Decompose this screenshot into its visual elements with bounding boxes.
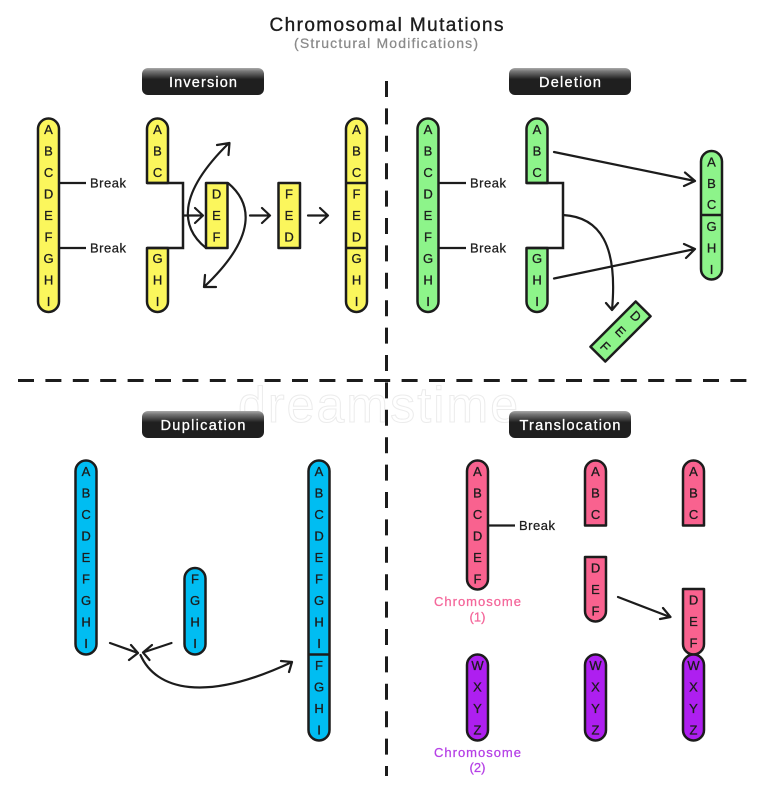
chromosome 2 middle: W <box>589 658 602 673</box>
chromosome 1 pink: D <box>473 528 482 544</box>
chromosome: original yellow: I <box>47 294 50 309</box>
break label upper <box>438 176 506 190</box>
heading: translocation: Translocation <box>520 418 620 434</box>
break label lower: Break <box>90 240 126 256</box>
arrow: ABC to result <box>554 152 695 186</box>
chromosome: lower fragment GHI: H <box>153 272 162 288</box>
chromosome: duplicated result: H <box>314 614 324 630</box>
fragment DEF middle: E <box>591 582 600 597</box>
chromosome: upper fragment ABC: C <box>153 165 162 180</box>
break bracket <box>526 183 563 248</box>
fragment DEF attached <box>683 589 704 654</box>
chromosome: original yellow: F <box>45 230 53 244</box>
chromosome: original yellow: B <box>44 144 53 158</box>
chromosome: duplicated result: F <box>315 658 323 673</box>
arrow: DEF removed <box>563 215 618 310</box>
heading: duplication <box>142 411 264 438</box>
chromosome: original yellow: C <box>44 165 53 180</box>
chromosome: deletion result: I <box>710 262 713 277</box>
chromosome: duplicated result: D <box>314 528 324 544</box>
arrow: to result <box>308 208 328 223</box>
arrow: to DEF <box>184 208 203 223</box>
break label lower: Break <box>470 240 506 256</box>
chromosome: original yellow: G <box>43 251 54 266</box>
fragment DEF <box>206 183 228 248</box>
chromosome: original blue: I <box>84 636 88 651</box>
chromosome: original yellow: E <box>44 208 53 223</box>
chromosome: duplicated result: G <box>314 593 324 608</box>
panel: duplication <box>76 411 330 740</box>
break label upper <box>59 176 126 190</box>
chromosome: inverted result: B <box>352 144 361 158</box>
break label lower <box>59 240 126 256</box>
chromosome 1 pink: A <box>473 464 482 479</box>
chromosome: original blue: F <box>82 572 90 586</box>
panel: deletion <box>418 68 722 362</box>
fragment DEF middle <box>585 557 606 622</box>
arrow: from original <box>110 643 138 660</box>
chromosome: copy FGHI: I <box>193 636 197 651</box>
chromosome 2 right: X <box>689 680 698 694</box>
chromosome: upper fragment ABC: C <box>532 165 542 180</box>
chromosome: original yellow <box>38 118 59 312</box>
chromosome: original blue: E <box>82 550 91 565</box>
fragment DEF middle: D <box>591 560 600 576</box>
title: Chromosomal Mutations <box>270 15 504 36</box>
subtitle: (Structural Modifications) <box>294 35 478 51</box>
chromosome: deletion result: C <box>707 197 716 212</box>
label: chromosome 2: (2) <box>470 760 485 775</box>
chromosome 2 middle: Z <box>592 722 600 738</box>
chromosome: original blue: A <box>82 464 91 479</box>
watermark: dreamstime <box>238 377 518 433</box>
chromosome: duplicated result: I <box>317 722 321 738</box>
chromosome: copy FGHI: F <box>191 572 199 586</box>
chromosome: original blue: G <box>81 593 91 608</box>
label: chromosome 2: Chromosome <box>434 745 521 760</box>
chromosome: original yellow: D <box>44 186 53 202</box>
fragment DEF rotated: D <box>627 308 644 325</box>
chromosome 1 pink: B <box>473 486 482 500</box>
chromosome: upper fragment ABC: A <box>533 122 542 137</box>
chromosome: inverted result: C <box>352 165 361 180</box>
chromosome: original green: C <box>423 165 433 180</box>
chromosome: original blue: D <box>81 528 91 544</box>
panel: translocation <box>434 411 704 775</box>
fragment DEF attached: D <box>689 592 698 608</box>
chromosome: duplicated result: F <box>315 572 323 586</box>
fragment ABC right: A <box>689 464 698 479</box>
chromosome: deletion result: H <box>707 240 716 256</box>
fragment ABC right: B <box>689 486 698 500</box>
fragment ABC middle: B <box>591 486 600 500</box>
chromosome: duplicated result: E <box>315 550 324 565</box>
fragment DEF rotated: E <box>612 323 629 340</box>
break label <box>488 518 556 533</box>
heading: duplication: Duplication <box>160 418 246 434</box>
arrow: curve up <box>188 143 230 248</box>
chromosome: upper fragment ABC: B <box>153 144 162 158</box>
fragment FED: D <box>284 230 294 244</box>
break label lower <box>438 240 506 256</box>
chromosome: original yellow: H <box>44 272 53 288</box>
chromosome: deletion result: G <box>706 219 717 234</box>
chromosome: inverted result: A <box>352 122 361 137</box>
heading: deletion: Deletion <box>539 75 601 91</box>
chromosome: original blue: B <box>82 486 90 500</box>
panel: inversion <box>38 68 367 312</box>
chromosome: original green: I <box>426 294 430 309</box>
arrow: GHI to result <box>554 244 695 278</box>
chromosome 2 right: Y <box>689 701 698 716</box>
chromosome 1 pink <box>467 460 488 590</box>
fragment ABC middle: C <box>591 507 600 522</box>
label: chromosome 2 <box>434 745 521 775</box>
chromosome: duplicated result: G <box>314 680 324 694</box>
fragment FED: E <box>285 208 294 223</box>
fragment ABC right: C <box>689 507 698 522</box>
chromosome: duplicated result: H <box>314 701 324 716</box>
fragment DEF rotated <box>590 301 651 362</box>
chromosome: inverted result <box>346 118 367 312</box>
label: chromosome 1: Chromosome <box>434 594 521 609</box>
fragment DEF attached: E <box>689 614 698 629</box>
label: chromosome 1 <box>434 594 521 624</box>
break label: Break <box>519 518 556 533</box>
chromosome: duplicated result: C <box>314 507 324 522</box>
chromosome 2 purple: W <box>471 658 484 673</box>
chromosome: inverted result: G <box>351 251 362 266</box>
chromosome 1 pink: C <box>473 507 482 522</box>
chromosome: original blue: H <box>81 614 91 630</box>
label: chromosome 1: (1) <box>470 610 485 624</box>
heading: deletion <box>509 68 631 95</box>
chromosome: original yellow: A <box>44 122 53 137</box>
fragment DEF: F <box>213 230 221 244</box>
chromosome: inverted result: I <box>355 294 358 309</box>
chromosome: lower fragment GHI: G <box>152 251 163 266</box>
chromosome: duplicated result <box>308 460 330 740</box>
chromosome 2 right <box>683 654 704 740</box>
break label upper: Break <box>470 176 506 190</box>
chromosome: original green: A <box>424 122 433 137</box>
break bracket <box>147 183 183 248</box>
chromosome: original blue: C <box>81 507 91 522</box>
chromosome: deletion result: B <box>707 176 716 191</box>
heading: translocation <box>509 411 631 438</box>
chromosome: original green: G <box>423 251 433 266</box>
chromosome: original green <box>418 118 438 312</box>
chromosome: original green: B <box>424 144 432 158</box>
heading: inversion <box>142 68 264 95</box>
chromosome: copy FGHI: G <box>190 593 200 608</box>
fragment DEF attached: F <box>690 636 698 650</box>
chromosome: lower fragment GHI: I <box>156 294 159 309</box>
chromosome: deletion result: A <box>707 154 716 170</box>
fragment FED: F <box>285 186 293 202</box>
chromosome 1 pink: E <box>473 550 482 565</box>
break label upper: Break <box>90 176 126 190</box>
chromosome: upper fragment ABC: A <box>153 122 162 137</box>
arrow: from copy <box>143 643 172 660</box>
vertical divider <box>385 81 388 776</box>
chromosome 2 middle: X <box>591 680 600 694</box>
chromosome 1 pink: F <box>474 572 482 586</box>
chromosome 2 middle: Y <box>591 701 600 716</box>
chromosome 2 right: W <box>687 658 700 673</box>
chromosome: upper fragment ABC: B <box>533 144 541 158</box>
chromosome: lower fragment GHI: I <box>535 294 539 309</box>
arrow: DEF moves <box>618 597 670 619</box>
chromosome 2 middle <box>585 654 606 740</box>
arrow: curve to result <box>140 655 292 687</box>
chromosome: inverted result: H <box>352 272 361 288</box>
chromosome: copy FGHI <box>184 568 206 654</box>
chromosome 2 purple: X <box>473 680 482 694</box>
fragment DEF rotated: F <box>597 339 613 355</box>
chromosome 2 right: Z <box>690 722 698 738</box>
chromosome: duplicated result: I <box>317 636 321 651</box>
fragment FED <box>278 183 300 248</box>
chromosome: original green: E <box>424 208 433 223</box>
chromosome: upper fragment ABC <box>147 118 168 183</box>
chromosome: inverted result: D <box>352 230 361 244</box>
chromosome: inverted result: E <box>352 208 361 223</box>
horizontal divider <box>18 379 752 382</box>
chromosome: duplicated result: A <box>315 464 324 479</box>
arrow: curve down <box>204 183 246 287</box>
chromosome 2 purple: Y <box>473 701 482 716</box>
heading: inversion: Inversion <box>169 75 237 91</box>
fragment DEF: E <box>212 208 221 223</box>
fragment ABC right <box>683 460 704 526</box>
chromosome: duplicated result: B <box>315 486 323 500</box>
chromosome: lower fragment GHI: G <box>532 251 542 266</box>
chromosome: deletion result <box>701 151 722 280</box>
chromosome 2 purple <box>467 654 488 740</box>
chromosome: upper fragment ABC <box>526 118 548 183</box>
chromosome: original green: D <box>423 186 433 202</box>
fragment DEF: D <box>212 186 221 202</box>
fragment ABC middle: A <box>591 464 600 479</box>
chromosome: inverted result: F <box>353 186 361 202</box>
chromosome: original blue <box>76 460 96 654</box>
chromosome: lower fragment GHI <box>526 248 548 312</box>
chromosome 2 purple: Z <box>474 722 482 738</box>
arrow: to FED <box>250 208 270 223</box>
fragment DEF middle: F <box>592 604 600 618</box>
chromosome: original green: F <box>424 230 432 244</box>
chromosome: lower fragment GHI: H <box>532 272 542 288</box>
chromosome: copy FGHI: H <box>190 614 200 630</box>
chromosome: original green: H <box>423 272 433 288</box>
fragment ABC middle <box>585 460 606 526</box>
chromosome: lower fragment GHI <box>147 248 168 312</box>
